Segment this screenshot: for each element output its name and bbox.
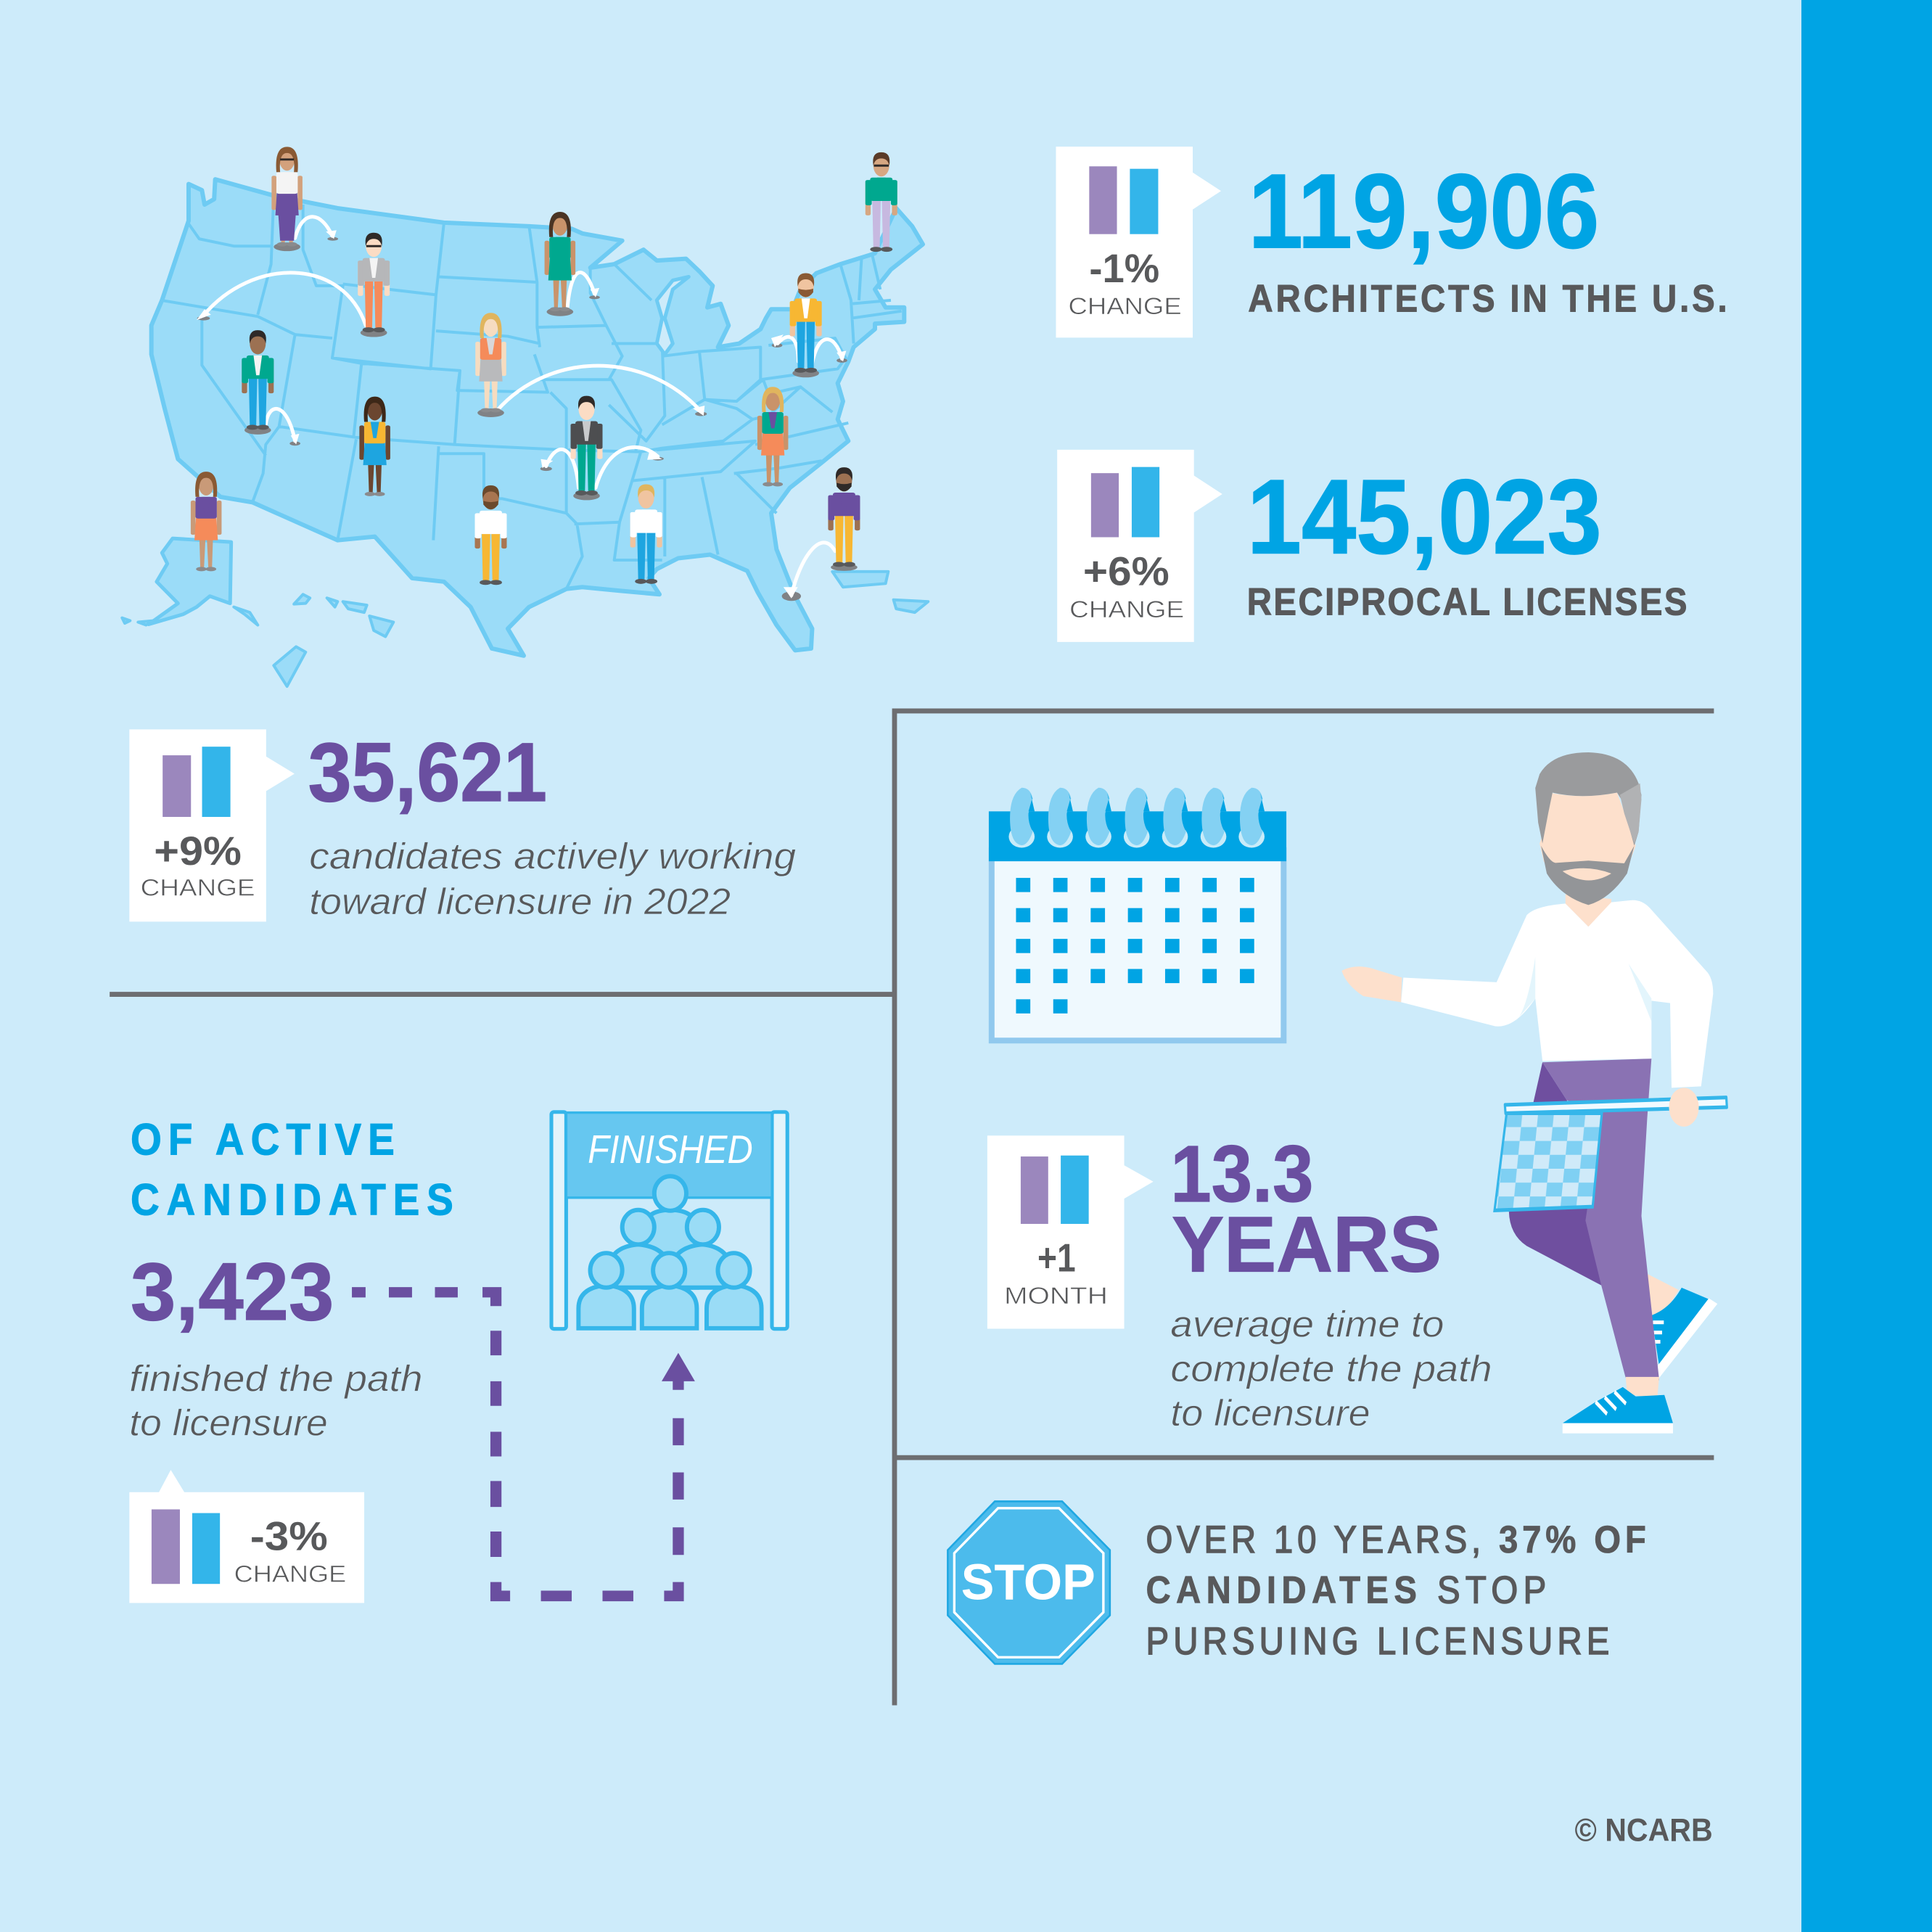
person: Nevada man	[242, 330, 274, 435]
person: Puerto Rico man	[828, 467, 860, 571]
stat: 13.3 years: YEARS	[1172, 1201, 1442, 1289]
change value: +6%	[1083, 548, 1170, 594]
stat: 119,906: 119,906	[1248, 152, 1599, 270]
description: average time: average time to	[1170, 1304, 1444, 1345]
icon: finish gate with crowd	[551, 1112, 787, 1329]
map: Alaska	[149, 538, 231, 625]
box with pointer	[129, 729, 295, 921]
change value: -1%	[1089, 245, 1159, 291]
back shoe	[1651, 1288, 1709, 1366]
bar: blue	[202, 747, 231, 817]
map: mainland	[152, 179, 923, 656]
front ankle	[1626, 1377, 1659, 1399]
change label: MONTH	[1004, 1283, 1108, 1309]
mouth	[1563, 868, 1611, 881]
change value: -3%	[250, 1513, 328, 1559]
illustration: man with checkered flag	[1341, 752, 1727, 1434]
arrowheads	[197, 230, 846, 599]
binder rings	[1008, 788, 1265, 847]
stop text: STOP	[961, 1553, 1096, 1610]
callout: candidates change	[129, 729, 295, 921]
octagon	[947, 1501, 1110, 1664]
bar: purple	[152, 1509, 180, 1584]
crowd	[578, 1176, 762, 1328]
back shoe sole	[1657, 1298, 1717, 1378]
description: average time: complete the path	[1170, 1348, 1492, 1389]
map: Lake Michigan	[657, 276, 688, 354]
neck	[1566, 895, 1611, 926]
bar: blue	[1132, 467, 1159, 537]
label: reciprocal licenses: RECIPROCAL LICENSES	[1247, 580, 1688, 623]
stat: 3,423: 3,423	[131, 1246, 334, 1337]
person: Nebraska woman	[475, 313, 506, 417]
person: Texas man	[475, 485, 507, 585]
text: over 10 years: OVER 10 YEARS, 37% OF	[1146, 1518, 1646, 1561]
icon: calendar	[989, 788, 1286, 1040]
bar: purple	[1021, 1156, 1048, 1224]
back leg	[1509, 1062, 1601, 1286]
front shoe sole	[1563, 1423, 1673, 1434]
back foot ankle	[1647, 1274, 1679, 1318]
change value: +1	[1037, 1236, 1076, 1281]
text: over 10 years	[1146, 1518, 1646, 1663]
beard	[1541, 846, 1635, 905]
stat: 35,621: 35,621	[308, 725, 547, 819]
description: average time	[1170, 1304, 1492, 1434]
checkered flag	[1495, 1113, 1602, 1210]
map of the United States with people	[122, 147, 928, 686]
change label: CHANGE	[1068, 293, 1182, 319]
box with pointer	[987, 1135, 1154, 1328]
left hand	[1341, 966, 1402, 1002]
bar: purple	[163, 755, 191, 817]
change label: CHANGE	[141, 875, 255, 901]
callout: time change	[987, 1135, 1154, 1328]
person: Idaho man	[358, 233, 390, 337]
shirt shading	[1516, 957, 1651, 1022]
bar: purple	[1091, 473, 1119, 537]
text: over 10 years: PURSUING LICENSURE	[1146, 1620, 1609, 1663]
bar: blue	[192, 1513, 220, 1584]
shirt	[1401, 900, 1713, 1088]
gate right post	[772, 1112, 787, 1329]
calendar header	[989, 811, 1286, 861]
hair highlight	[1620, 784, 1641, 844]
inner white ring	[954, 1508, 1103, 1657]
bar: blue	[1130, 169, 1158, 234]
calendar day squares	[1016, 878, 1254, 1014]
arcs: relocation arrows	[197, 217, 847, 601]
callout: finished change	[129, 1470, 364, 1603]
heading: of active candidates: CANDIDATES	[131, 1175, 453, 1225]
hair	[1535, 752, 1641, 846]
bar: purple	[1089, 166, 1117, 234]
banner text: FINISHED	[588, 1127, 753, 1172]
description: active candidates	[309, 835, 796, 922]
person: Minnesota woman	[545, 212, 575, 316]
person: Colorado woman	[359, 397, 390, 496]
change value: +9%	[154, 828, 242, 873]
label: architects in the U.S.: ARCHITECTS IN THE U.S.	[1248, 277, 1727, 320]
map: state borders	[161, 196, 902, 589]
description: finished the path: to licensure	[129, 1402, 328, 1444]
description: active candidates: toward licensure in 2022	[309, 881, 731, 922]
shadow markers	[197, 237, 847, 601]
gate left post	[551, 1112, 566, 1329]
person: Missouri man	[571, 396, 603, 500]
callout: reciprocal change	[1057, 450, 1222, 642]
front leg	[1542, 1059, 1659, 1380]
change label: CHANGE	[1069, 596, 1184, 622]
description: average time: to licensure	[1170, 1392, 1370, 1434]
credit: NCARB: © NCARB	[1574, 1812, 1713, 1848]
change label: CHANGE	[234, 1561, 346, 1587]
calendar page	[992, 850, 1283, 1040]
back shoe laces	[1653, 1323, 1664, 1341]
flag pole	[1505, 1098, 1727, 1113]
callout: architects change	[1056, 147, 1221, 337]
description: active candidates: candidates actively working	[309, 835, 796, 876]
stat: 13.3 years: 13.3	[1170, 1130, 1313, 1219]
person: Alaska woman	[191, 472, 221, 571]
text: over 10 years: CANDIDATES STOP	[1146, 1569, 1546, 1611]
right hand	[1669, 1088, 1699, 1127]
gate banner	[566, 1113, 772, 1198]
box with pointer	[1056, 147, 1221, 337]
stat: 145,023: 145,023	[1247, 458, 1602, 576]
front shoe laces	[1595, 1392, 1626, 1414]
bar: blue	[1061, 1156, 1089, 1224]
description: finished the path: finished the path	[129, 1357, 423, 1399]
icon: stop sign	[947, 1501, 1110, 1664]
heading: of active candidates: OF ACTIVE	[131, 1115, 395, 1164]
heading: of active candidates	[131, 1115, 453, 1225]
description: finished the path	[129, 1357, 423, 1444]
person: Washington woman	[271, 147, 303, 251]
front shoe	[1563, 1387, 1673, 1423]
face	[1540, 792, 1636, 874]
right accent stripe	[1801, 0, 1932, 1932]
map: islands	[122, 572, 928, 686]
person: New York man	[790, 274, 822, 377]
dashed arrow path to finish	[352, 1287, 695, 1601]
person: Mississippi man	[630, 485, 662, 584]
box with pointer	[1057, 450, 1222, 642]
divider lines	[110, 711, 1714, 1706]
stat: 13.3 years	[1170, 1130, 1442, 1289]
box with pointer	[129, 1470, 364, 1603]
person: Maine man	[866, 152, 897, 252]
person: Virginia woman	[757, 387, 788, 487]
